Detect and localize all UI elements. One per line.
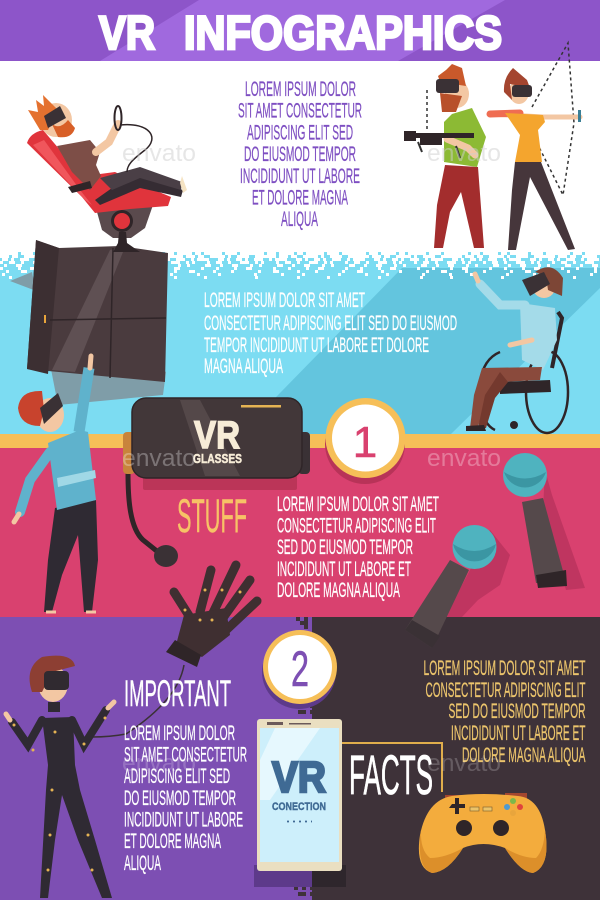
text block: cyan panel [204,289,457,378]
panel: purple section [0,617,312,900]
illustration: haptic glove [92,565,257,737]
title: VR [99,6,155,59]
panel: yellow divider [0,434,600,448]
text block: top intro: DO EIUSMOD TEMPOR [244,143,356,166]
watermarks: envato [427,445,501,472]
goggles label: GLASSES [193,451,242,466]
text block: dark panel [424,657,586,767]
header banner [0,0,600,61]
illustration: console box with shadow [10,240,168,405]
goggles label: VR [194,414,240,457]
text block: purple panel: INCIDIDUNT UT LABORE [124,808,243,832]
illustration: game controller [419,793,546,873]
text block: top intro [238,78,362,231]
illustration: woman reaching up [14,356,98,612]
text block: purple panel: ALIQUA [124,852,161,875]
text block: purple panel: LOREM IPSUM DOLOR [124,722,235,745]
illustration: man in racing seat [27,95,187,252]
phone label: CONECTION [272,801,326,813]
text: IMPORTANT [124,673,231,714]
watermarks [122,140,501,777]
panel: white top section [0,61,600,256]
text block: cyan panel: MAGNA ALIQUA [204,355,283,378]
illustration: motion capture woman [6,656,114,898]
text block: top intro: LOREM IPSUM DOLOR [245,78,356,101]
badge: number 1: 1 [353,418,377,467]
watermarks: envato [122,750,196,777]
panel: pink section [0,448,600,617]
text block: top intro: ALIQUA [281,208,318,231]
text: STUFF [177,489,247,542]
facts frame [339,743,442,792]
watermarks: envato [122,445,196,472]
text block: purple panel: ADIPISCING ELIT SED [124,765,230,788]
text block: pink panel [277,493,439,602]
phone label: VR [272,753,326,802]
illustration: woman archer [490,43,581,250]
watermarks: envato [427,750,501,777]
text block: pink panel: SED DO EIUSMOD TEMPOR [277,536,413,559]
illustration: VR goggles [123,398,310,567]
panel: cyan section [0,252,600,434]
text: FACTS [349,743,433,806]
illustration: person in wheelchair [466,267,568,433]
text block: pink panel: LOREM IPSUM DOLOR SIT AMET [277,493,439,516]
text: SIT AMET CONSECTETUR [124,744,247,767]
watermarks: envato [427,140,501,167]
illustration: man with VR gun [404,64,486,248]
text block: top intro: ET DOLORE MAGNA [252,186,348,210]
illustration: left motion controller [405,525,510,648]
text block: pink panel: DOLORE MAGNA ALIQUA [277,579,400,602]
text block: pink panel: INCIDIDUNT UT LABORE ET [277,558,411,581]
badge: number 2 [262,630,337,709]
illustration: right motion controller [503,453,585,590]
illustration: smartphone [254,719,346,887]
text block: top intro: ADIPISCING ELIT SED [247,122,353,144]
panel: dark section [294,617,600,900]
pixel band [0,254,600,278]
watermarks: envato [122,140,196,167]
text: INCIDIDUNT UT LABORE [240,165,360,188]
text block: purple panel: ET DOLORE MAGNA [124,830,221,853]
text: SIT AMET CONSECTETUR [238,100,362,123]
text block: cyan panel: LOREM IPSUM DOLOR SIT AMET [204,289,365,312]
text block: purple panel: DO EIUSMOD TEMPOR [124,787,236,810]
badge: number 1 [325,398,406,484]
badge: number 2: 2 [291,641,309,697]
title: INFOGRAPHICS [184,6,502,59]
text block: purple panel [124,722,247,875]
